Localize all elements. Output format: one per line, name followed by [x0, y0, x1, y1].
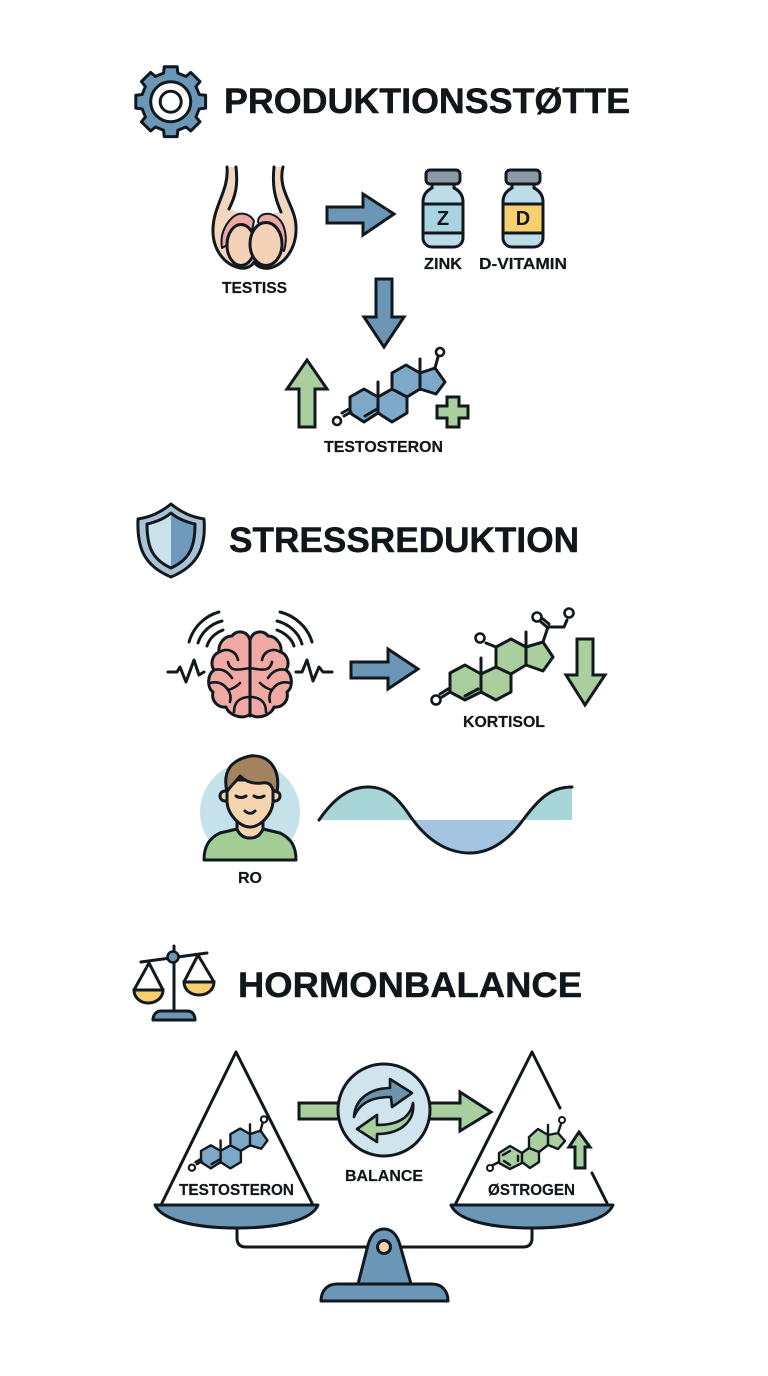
chart: calm wave — [319, 787, 572, 853]
panel: produktionsstøtte — [136, 67, 630, 456]
label: ro: RO — [238, 870, 262, 887]
icon: scale stand — [237, 1228, 532, 1301]
icon: zinc bottle: Z — [437, 208, 449, 230]
label: testosteron: TESTOSTERON — [179, 1182, 294, 1199]
label: d-vitamin: D-VITAMIN — [479, 256, 567, 273]
icon: vitamin d bottle — [503, 170, 543, 247]
label: kortisol: KORTISOL — [463, 714, 545, 731]
panel: hormonbalance — [134, 946, 613, 1301]
icon: plus — [437, 397, 468, 427]
arrow: testes to vitamins — [327, 194, 394, 235]
pan dish — [451, 1205, 613, 1228]
icon: vitamin d bottle: D — [516, 208, 530, 230]
label: balance: BALANCE — [345, 1168, 423, 1185]
heading: stressreduktion: STRESSREDUKTION — [229, 521, 579, 560]
arrow: estrogen up — [569, 1132, 590, 1168]
label: testosteron: TESTOSTERON — [324, 439, 443, 456]
icon: estrogen molecule — [487, 1117, 565, 1171]
label: zink: ZINK — [424, 256, 462, 273]
right scale pan: estrogen — [451, 1052, 613, 1228]
arrow: down to testosterone — [364, 279, 404, 347]
arrow: brain to cortisol — [351, 649, 418, 689]
heading: hormonbalance: HORMONBALANCE — [238, 966, 582, 1005]
arrow: cortisol down — [566, 639, 605, 705]
icon: testosterone molecule — [333, 348, 445, 425]
label: østrogen: ØSTROGEN — [488, 1182, 575, 1199]
icon: scales — [134, 946, 214, 1020]
icon: testes — [213, 167, 296, 268]
icon: testosterone molecule small — [189, 1116, 268, 1171]
icon: calm person — [200, 756, 300, 862]
icon: zinc bottle — [423, 170, 463, 247]
pan dish — [155, 1205, 318, 1228]
icon: gear — [136, 67, 206, 137]
heading: produktionsstøtte: PRODUKTIONSSTØTTE — [224, 82, 630, 121]
arrow: testosterone up — [287, 360, 327, 427]
panel: stressreduktion — [138, 504, 605, 887]
arrow: balance flow — [299, 1092, 491, 1131]
icon: cortisol molecule — [432, 608, 574, 704]
icon: brain with stress waves — [168, 612, 332, 717]
icon: shield — [138, 504, 204, 577]
label: testiss: TESTISS — [222, 280, 287, 297]
icon: balance cycle — [338, 1064, 430, 1156]
left scale pan: testosterone — [155, 1052, 318, 1228]
